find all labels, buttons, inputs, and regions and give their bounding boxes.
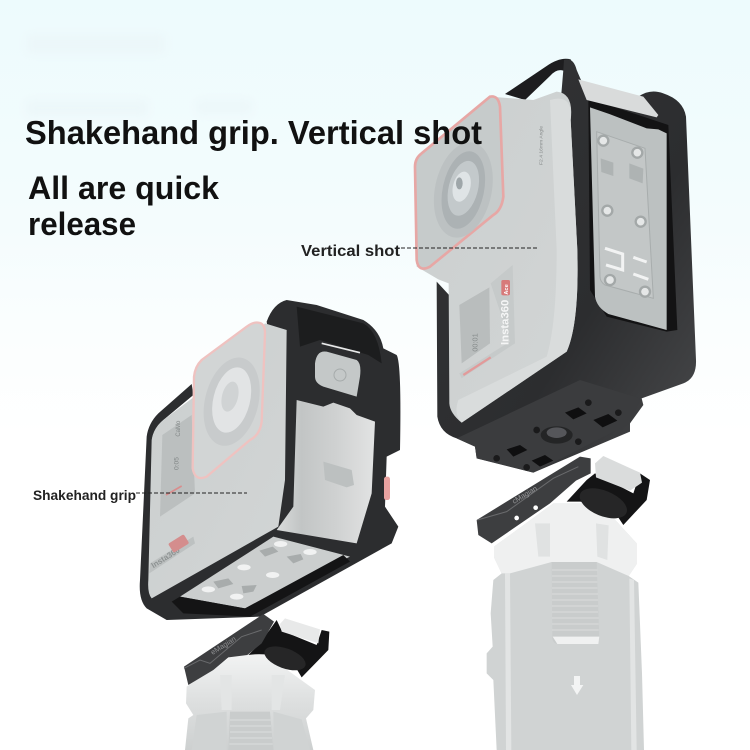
callout: shakehand grip: Shakehand grip <box>33 488 136 503</box>
bottom panel <box>180 537 350 608</box>
back window with panel <box>588 98 677 332</box>
clamp: left quick-release plate: eMagian <box>209 634 238 657</box>
side panel <box>277 400 375 543</box>
lens housing <box>415 96 503 269</box>
vertical camera in cage <box>415 59 696 473</box>
grip: right handle <box>487 503 644 750</box>
vertical camera in cage: F2.4 16mm Angle <box>539 126 545 165</box>
clamp: right quick-release plate: cMagian <box>510 484 539 506</box>
shakehand camera in cage: 0:05 <box>173 457 180 470</box>
screen panel <box>459 287 490 363</box>
lens housing <box>193 322 265 478</box>
faint smudges top left <box>26 34 252 116</box>
grip: left handle <box>185 655 315 750</box>
cage body <box>437 59 696 473</box>
subheading: all are quick release: release <box>28 206 136 242</box>
red side latch <box>384 477 390 500</box>
clamp: right quick-release plate <box>477 456 650 543</box>
vertical camera in cage: 00:01 <box>470 333 479 352</box>
subheading: all are quick release: All are quick <box>28 170 219 206</box>
vertical camera in cage: Ace <box>504 284 510 295</box>
hinge <box>297 307 382 363</box>
shakehand camera in cage <box>140 300 400 620</box>
shakehand camera in cage: CaMo <box>176 420 182 437</box>
cage body <box>140 300 400 620</box>
camera front body <box>417 92 578 423</box>
camera front <box>148 323 287 598</box>
callout: vertical shot: Vertical shot <box>301 243 400 260</box>
brand text: Insta360 <box>499 300 511 345</box>
clamp: left quick-release plate <box>184 614 329 685</box>
bottom plate <box>457 380 640 473</box>
cage strap <box>505 59 576 100</box>
heading: shakehand grip, vertical shot: Shakehand grip. Vertical shot <box>25 114 482 151</box>
logo plate <box>459 265 515 378</box>
shakehand camera in cage: Insta360 <box>150 545 182 570</box>
power button <box>315 351 360 397</box>
